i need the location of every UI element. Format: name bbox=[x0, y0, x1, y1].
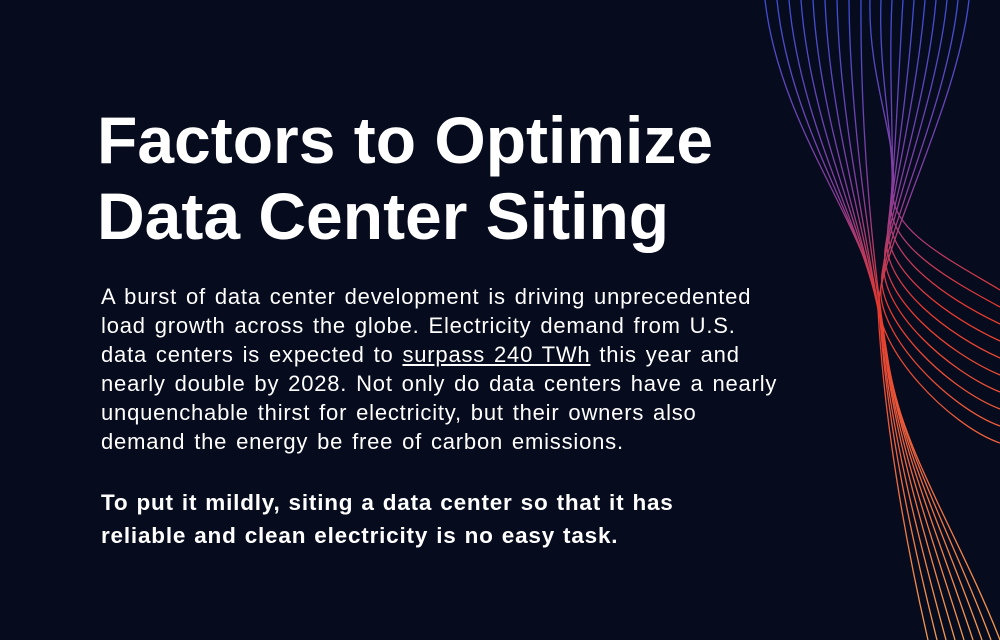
title: Data Center Siting bbox=[97, 179, 669, 253]
bold conclusion paragraph bbox=[101, 490, 674, 548]
body paragraph: load growth across the globe. Electricity demand from U.S. bbox=[101, 313, 736, 338]
body paragraph: demand the energy be free of carbon emissions. bbox=[101, 429, 624, 454]
bold conclusion paragraph: reliable and clean electricity is no easy task. bbox=[101, 523, 618, 548]
body paragraph: A burst of data center development is driving unprecedented bbox=[101, 284, 751, 309]
body paragraph: data centers is expected to surpass 240 TWh this year and bbox=[101, 342, 740, 367]
body paragraph: unquenchable thirst for electricity, but their owners also bbox=[101, 400, 697, 425]
bold conclusion paragraph: To put it mildly, siting a data center so that it has bbox=[101, 490, 674, 515]
title: Factors to Optimize bbox=[97, 103, 713, 177]
body paragraph: nearly double by 2028. Not only do data centers have a nearly bbox=[101, 371, 777, 396]
title bbox=[97, 103, 713, 253]
body paragraph bbox=[101, 284, 777, 454]
